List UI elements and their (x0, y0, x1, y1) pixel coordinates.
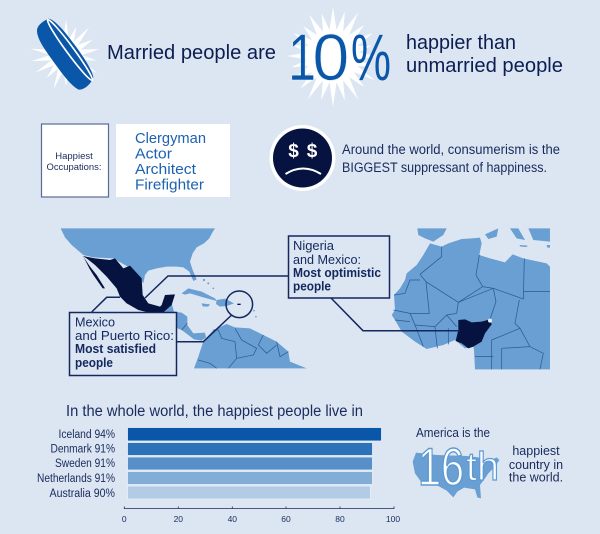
icon: US map silhouette with 16th: th (466, 445, 499, 489)
map: Americas (61, 228, 307, 368)
country labels (37, 429, 115, 500)
callout: Mexico and Puerto Rico most satisfied (70, 291, 253, 376)
callout: Nigeria and Mexico most optimistic: Most optimistic (293, 265, 381, 280)
text: happier than unmarried people: happier than (406, 31, 516, 54)
icon: sad face with dollar eyes: $ (288, 141, 299, 162)
text: happier than unmarried people (406, 31, 563, 77)
callout: Nigeria and Mexico most optimistic: and Mexico: (293, 252, 361, 267)
country labels: Iceland 94% (58, 429, 115, 441)
statistic: 10%: 0 (312, 20, 349, 94)
panel: occupations list: Actor (135, 146, 172, 162)
axis: 0 (122, 514, 127, 524)
icon: US map silhouette with 16th: 16 (418, 438, 464, 497)
icon: sad face with dollar eyes (270, 125, 336, 191)
axis: 80 (335, 514, 345, 524)
axis: 60 (281, 514, 291, 524)
country labels: Denmark 91% (50, 444, 115, 456)
panel: occupations list (116, 124, 230, 197)
text: America is the: America is the (416, 426, 490, 440)
text: happier than unmarried people: unmarried people (406, 54, 563, 77)
panel: happiest occupations label (42, 124, 108, 197)
panel: happiest occupations label: Happiest (55, 151, 93, 162)
statistic: 10%: 1 (288, 20, 316, 94)
axis: 100 (386, 514, 400, 524)
country: Puerto Rico highlighted (237, 304, 241, 305)
axis (122, 506, 400, 524)
callout: Mexico and Puerto Rico most satisfied: Most satisfied (75, 341, 156, 356)
heading: married people are: Married people are (107, 41, 276, 64)
country labels: Sweden 91% (55, 458, 115, 470)
statistic: 10%: % (351, 20, 391, 94)
country labels: Australia 90% (50, 488, 115, 500)
text: happiest country in the world: country in (509, 458, 563, 472)
callout: Nigeria and Mexico most optimistic: people (293, 278, 331, 294)
icon: starburst behind 10% (287, 7, 377, 107)
country labels: Netherlands 91% (37, 473, 115, 485)
text: consumerism statement: BIGGEST suppressant of happiness. (342, 160, 547, 175)
callout: Mexico and Puerto Rico most satisfied: Mexico (75, 315, 115, 330)
icon: US map silhouette with 16th (413, 438, 499, 498)
text: consumerism statement (342, 142, 560, 175)
country: Mexico highlighted (83, 256, 175, 314)
text: happiest country in the world (509, 444, 563, 484)
icon: sad face with dollar eyes: $ (307, 141, 318, 162)
panel: occupations list: Clergyman (135, 130, 206, 147)
callout: Nigeria and Mexico most optimistic: Nigeria (293, 238, 335, 253)
icon: wedding ring with starburst (30, 17, 100, 90)
text: happiest country in the world: the world. (509, 470, 563, 484)
callout: Mexico and Puerto Rico most satisfied: and Puerto Rico: (75, 328, 174, 343)
panel: occupations list: Architect (135, 161, 197, 178)
callout: Nigeria and Mexico most optimistic (145, 236, 460, 331)
heading: happiest people chart title: In the whole world, the happiest people live in (66, 403, 363, 420)
axis: 20 (174, 514, 183, 524)
callout: Mexico and Puerto Rico most satisfied: people (75, 355, 113, 370)
panel: occupations list: Firefighter (135, 176, 204, 194)
panel: happiest occupations label: Occupations: (46, 162, 102, 173)
bars (128, 428, 382, 499)
statistic: 10% (288, 20, 391, 94)
bar chart: happiest countries (37, 428, 400, 524)
map: West Africa (392, 228, 550, 369)
axis: 40 (228, 514, 237, 524)
country: Nigeria highlighted (456, 319, 492, 348)
text: consumerism statement: Around the world, consumerism is the (342, 142, 560, 157)
text: happiest country in the world: happiest (512, 444, 560, 458)
